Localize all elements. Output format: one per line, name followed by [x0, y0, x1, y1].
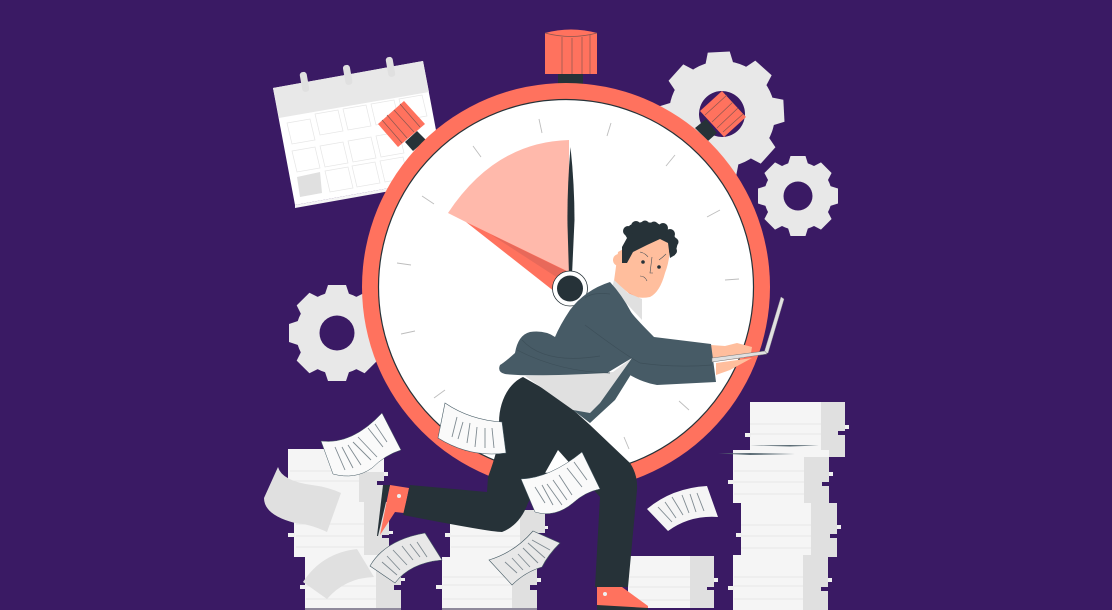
- top crown: [545, 30, 597, 86]
- shirt: [525, 358, 632, 413]
- needle: [567, 147, 574, 275]
- ear: [613, 254, 625, 266]
- icon: large gear: [657, 49, 787, 179]
- paper stack: middle: [436, 510, 548, 610]
- hub: [552, 271, 588, 306]
- flying paper: grey left sheet: [264, 467, 341, 532]
- dial: [378, 100, 754, 474]
- icon: small gear: [758, 156, 838, 236]
- flying paper: right sheet: [647, 486, 718, 531]
- elapsed time sector: [448, 140, 569, 274]
- sector wedge: [466, 222, 569, 292]
- case: [362, 83, 770, 491]
- character: running businessman: [377, 220, 784, 610]
- flying paper: sheet under the knee: [489, 531, 560, 585]
- icon: calendar: [273, 56, 446, 208]
- flying paper: top left sheet: [321, 413, 401, 476]
- left pusher: [378, 101, 426, 151]
- shoe: front: [597, 587, 648, 610]
- laptop: [712, 297, 784, 362]
- flying paper: centre sheet: [438, 403, 506, 454]
- stopwatch: [362, 30, 770, 491]
- trousers: [403, 377, 637, 587]
- flying paper: sheet across the leg: [521, 452, 600, 514]
- flying paper: grey lower sheet: [303, 549, 374, 599]
- hair: [622, 220, 678, 263]
- hand: upper: [711, 343, 752, 362]
- minute ticks: [397, 119, 739, 449]
- face details: [640, 252, 666, 281]
- right pusher: [695, 91, 746, 141]
- icon: left gear: [289, 285, 385, 381]
- neck and face: [614, 236, 670, 298]
- collar shadow: [628, 292, 642, 303]
- paper stack: right: [718, 402, 849, 610]
- jacket tail: [573, 358, 640, 423]
- paper stack: small by the foot: [628, 556, 718, 608]
- collar: [612, 280, 642, 320]
- jacket: [499, 282, 716, 385]
- paper stack: left: [288, 449, 405, 610]
- shoe: rear: [377, 485, 409, 536]
- flying paper: lower left sheet: [370, 533, 442, 583]
- hand: lower: [716, 358, 752, 375]
